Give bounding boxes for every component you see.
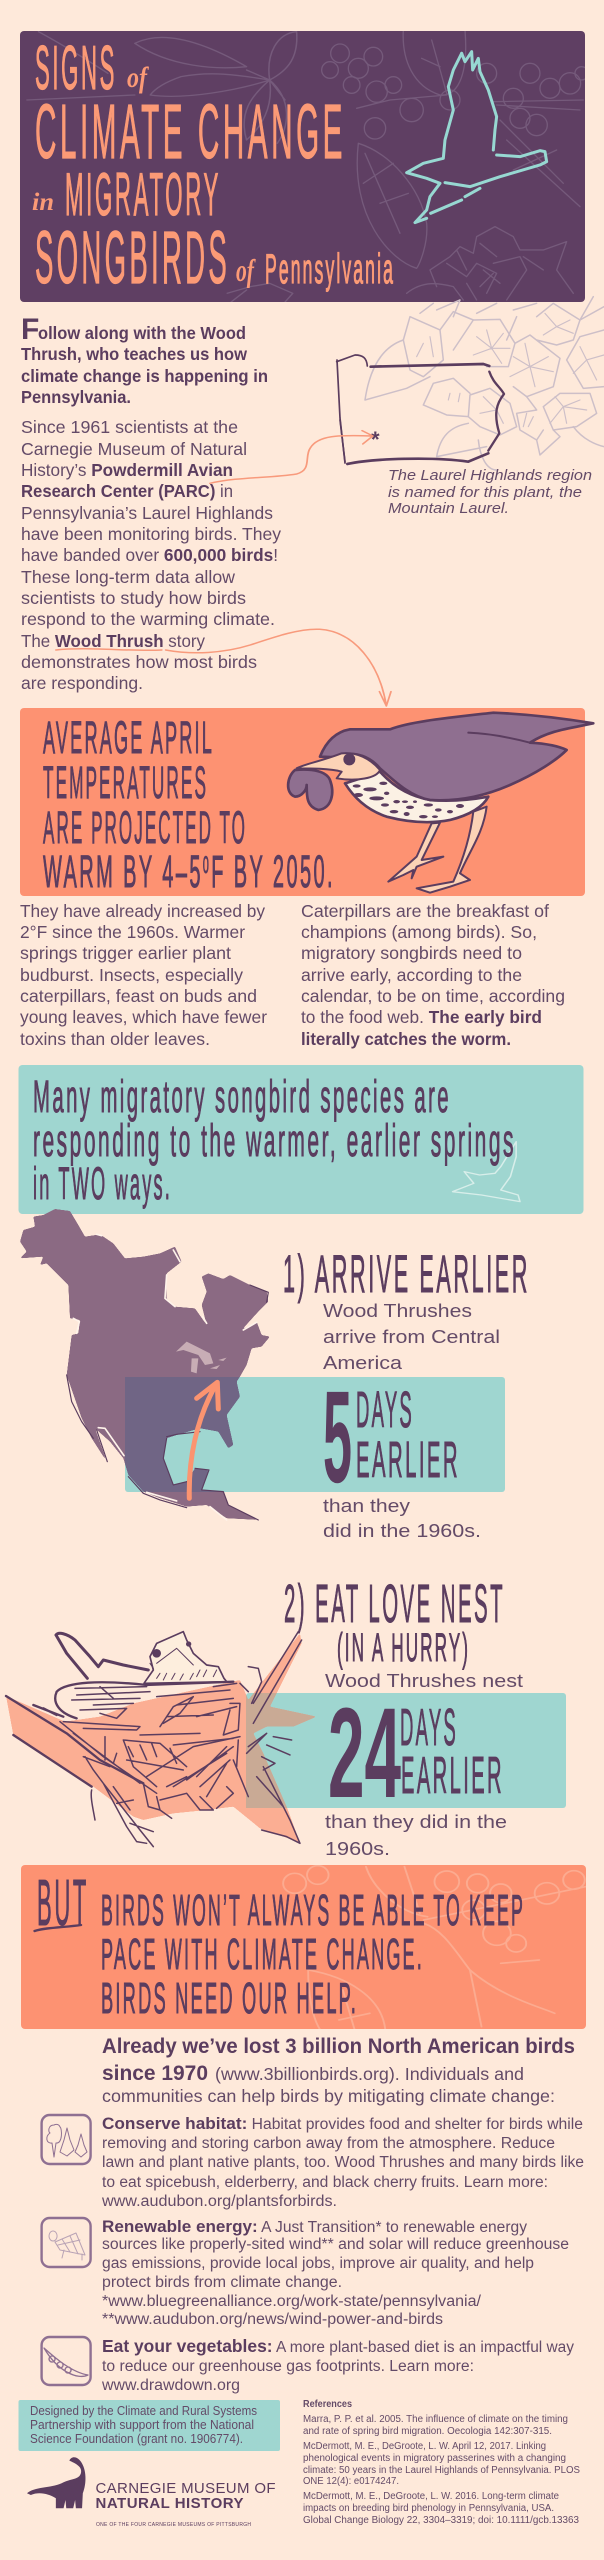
text block: warming right column: arrive early, according to the bbox=[301, 965, 522, 985]
text block: warming right column: literally catches the worm. bbox=[301, 1029, 511, 1049]
caption: Laurel Highlands: The Laurel Highlands region bbox=[388, 468, 592, 484]
caption: Laurel Highlands: is named for this plant, the bbox=[388, 485, 582, 501]
text block: references: McDermott, M. E., DeGroote, L. W. 2016. Long-term climate bbox=[303, 2491, 559, 2502]
text: credits: Designed by the Climate and Rural Systems bbox=[30, 2403, 257, 2418]
text block: conserve habitat: removing and storing carbon away from the atmosphere. Reduce bbox=[102, 2135, 555, 2152]
text block: than they did: than they did in the bbox=[325, 1811, 507, 1832]
text block: warming left column bbox=[20, 901, 267, 1049]
text block: introduction: F bbox=[21, 313, 39, 346]
text block: introduction: are responding. bbox=[21, 673, 143, 693]
icon: mountain laurel outline bbox=[365, 297, 604, 470]
text block: introduction: ollow along with the Wood bbox=[38, 323, 246, 343]
text block: arrive from Central America: arrive from Central bbox=[323, 1326, 500, 1347]
map details: Great Lakes and coast highlights bbox=[67, 1234, 268, 1520]
text block: introduction: History’s Powdermill Avian bbox=[21, 460, 233, 480]
icon: pea pod bbox=[42, 2337, 91, 2385]
text block: introduction: Research Center (PARC) in bbox=[21, 481, 233, 501]
text block: warming left column: young leaves, which have fewer bbox=[20, 1007, 267, 1027]
arrow: PARC to map bbox=[210, 431, 373, 483]
text block: warming right column: calendar, to be on time, according bbox=[301, 986, 565, 1006]
panel: birds need our help bbox=[21, 1865, 586, 2029]
text block: than they did: 1960s. bbox=[325, 1838, 390, 1859]
text block: conserve habitat: www.audubon.org/plantsforbirds. bbox=[101, 2193, 337, 2210]
text block: warming left column: budburst. Insects, especially bbox=[20, 965, 243, 985]
icon: solar panel bbox=[42, 2218, 91, 2267]
text block: than they did bbox=[325, 1811, 507, 1859]
logo: Carnegie Museum of Natural History: NATURAL HISTORY bbox=[96, 2495, 244, 2512]
text block: references: climate: 50 years in the Laurel Highlands of Pennsylvania. PLOS bbox=[303, 2465, 580, 2476]
text block: 3 billion birds lost: since 1970 bbox=[102, 2062, 208, 2085]
icon: dinosaur bbox=[27, 2457, 86, 2508]
text: credits: Partnership with support from the National bbox=[30, 2417, 254, 2432]
caption: Laurel Highlands: Mountain Laurel. bbox=[388, 501, 509, 517]
panel: title header bbox=[20, 30, 588, 302]
map: North America base bbox=[20, 1209, 270, 1520]
text block: introduction bbox=[21, 313, 281, 693]
text block: than in the 1960s: did in the 1960s. bbox=[323, 1520, 481, 1541]
panel: two ways bbox=[18, 1065, 584, 1214]
caption: Laurel Highlands bbox=[388, 468, 592, 517]
heading: But bbox=[35, 1866, 89, 1939]
icon: bird on nest bbox=[6, 1632, 302, 1847]
text block: introduction: Carnegie Museum of Natural bbox=[21, 439, 247, 459]
heading: projected warming: TEMPERATURES bbox=[43, 757, 208, 808]
map: North America overlap with box bbox=[125, 1377, 240, 1492]
panel: April temperatures: F BY 2050. bbox=[211, 846, 335, 897]
text block: introduction: scientists to study how birds bbox=[21, 588, 246, 608]
panel: credits bbox=[18, 2400, 280, 2451]
text block: 3 billion birds lost bbox=[102, 2035, 575, 2106]
text block: eat your vegetables: www.drawdown.org bbox=[101, 2377, 240, 2394]
text block: 3 billion birds lost: Already we’ve lost 3 billion North American birds bbox=[102, 2035, 575, 2058]
panel: five days earlier box bbox=[125, 1377, 505, 1492]
text block: references: ONE 12(4): e0174247. bbox=[303, 2476, 399, 2487]
statistic: 24 days earlier: 24 bbox=[328, 1682, 401, 1825]
statistic: 5 days earlier bbox=[323, 1363, 460, 1510]
text block: warming right column: to the food web. The early bird bbox=[301, 1007, 542, 1027]
heading: projected warming: ARE PROJECTED TO bbox=[43, 802, 247, 853]
text block: warming right column: migratory songbirds need to bbox=[301, 943, 522, 963]
title: Signs of Climate Change in Migratory Songbirds of Pennsylvania bbox=[32, 34, 395, 299]
text block: introduction: Thrush, who teaches us how bbox=[21, 344, 247, 364]
title: Signs of Climate Change in Migratory Songbirds of Pennsylvania: of bbox=[127, 61, 149, 94]
map: star and left border bbox=[337, 360, 345, 463]
arrow: northward migration bbox=[189, 1382, 218, 1498]
text block: introduction: have banded over 600,000 birds! bbox=[21, 545, 278, 565]
text block: eat your vegetables bbox=[101, 2336, 574, 2394]
text block: introduction: Since 1961 scientists at the bbox=[21, 417, 238, 437]
icon: nest peach base bbox=[6, 1633, 317, 1843]
logo: Carnegie Museum of Natural History bbox=[27, 2457, 275, 2528]
title: Signs of Climate Change in Migratory Songbirds of Pennsylvania: SONGBIRDS bbox=[35, 216, 230, 299]
text block: introduction: demonstrates how most birds bbox=[21, 652, 257, 672]
decorative plant outlines in header bbox=[27, 30, 588, 302]
statistic: 24 days earlier: DAYS bbox=[400, 1699, 458, 1757]
text block: references: phenological events in migratory passerines with a changing bbox=[303, 2453, 566, 2464]
text block: conserve habitat: lawn and plant native plants, too. Wood Thrushes and many birds like bbox=[102, 2154, 584, 2171]
heading: two ways bbox=[33, 1071, 516, 1209]
text block: arrive from Central America bbox=[323, 1300, 500, 1373]
text block: conserve habitat: to eat spicebush, elderberry, and black cherry fruits. Learn more: bbox=[102, 2174, 548, 2191]
title: Signs of Climate Change in Migratory Songbirds of Pennsylvania: SIGNS bbox=[35, 34, 117, 103]
text block: renewable energy: protect birds from climate change. bbox=[102, 2274, 342, 2291]
panel: twenty-four days box bbox=[246, 1693, 566, 1808]
heading: eat love nest bbox=[284, 1574, 505, 1670]
title: Signs of Climate Change in Migratory Songbirds of Pennsylvania: in bbox=[32, 189, 54, 216]
statistic: 5 days earlier: 5 bbox=[323, 1363, 352, 1510]
heading: birds can't keep pace bbox=[101, 1886, 525, 2023]
text block: introduction: Pennsylvania’s Laurel Highlands bbox=[21, 503, 273, 523]
heading: projected warming: 0 bbox=[203, 852, 211, 879]
icon: map star: * bbox=[371, 427, 380, 452]
text: credits: Science Foundation (grant no. 1906774). bbox=[30, 2431, 243, 2446]
text block: eat your vegetables: Eat your vegetables: A more plant-based diet is an impactful way bbox=[102, 2336, 574, 2356]
text block: references: and rate of spring bird migration. Oecologia 142:307-315. bbox=[303, 2426, 552, 2437]
text block: conserve habitat bbox=[101, 2114, 584, 2210]
panel: title header: Pennsylvania bbox=[265, 245, 395, 292]
map: Pennsylvania outline with Laurel Highlands star bbox=[337, 355, 504, 464]
text block: than in the 1960s bbox=[323, 1495, 481, 1541]
heading: projected warming: AVERAGE APRIL bbox=[43, 712, 214, 763]
logo: Carnegie Museum of Natural History: ONE OF THE FOUR CARNEGIE MUSEUMS OF PITTSBURGH bbox=[96, 2522, 251, 2528]
heading: projected warming: WARM BY 4–5 bbox=[43, 846, 403, 897]
text block: warming right column: Caterpillars are the breakfast of bbox=[301, 901, 549, 921]
text block: warming right column bbox=[301, 901, 565, 1049]
text block: references: Marra, P. P. et al. 2005. The influence of climate on the timing bbox=[303, 2414, 568, 2425]
text block: introduction: have been monitoring birds. They bbox=[21, 524, 281, 544]
text block: references bbox=[303, 2399, 580, 2526]
heading: projected warming bbox=[43, 712, 335, 897]
icon: flying bird outline bbox=[407, 52, 547, 223]
text block: warming left column: caterpillars, feast on buds and bbox=[20, 986, 257, 1006]
icon: wood thrush eating a caterpillar bbox=[288, 713, 593, 893]
icon: nest overlap with box bbox=[246, 1693, 315, 1808]
text block: renewable energy: gas emissions, provide local jobs, improve air quality, and help bbox=[102, 2255, 534, 2272]
icon: trees bbox=[42, 2115, 91, 2164]
text block: 3 billion birds lost: communities can help birds by mitigating climate change: bbox=[102, 2086, 555, 2106]
panel: birds need our help: BUT bbox=[37, 1866, 89, 1939]
logo: Carnegie Museum of Natural History: CARNEGIE MUSEUM OF bbox=[96, 2480, 276, 2497]
text block: warming left column: toxins than older leaves. bbox=[20, 1029, 210, 1049]
text block: warming left column: 2°F since the 1960s. Warmer bbox=[20, 922, 245, 942]
icon: pale bird outline bbox=[453, 1142, 520, 1202]
panel: April temperatures bbox=[20, 708, 593, 897]
text: credits bbox=[30, 2403, 257, 2446]
text block: introduction: These long-term data allow bbox=[21, 567, 235, 587]
title: Signs of Climate Change in Migratory Songbirds of Pennsylvania: of bbox=[236, 252, 256, 288]
statistic: 5 days earlier: DAYS bbox=[356, 1381, 414, 1438]
text block: references: impacts on breeding bird phenology in Pennsylvania, USA. bbox=[303, 2503, 554, 2514]
text: wood thrushes nest: Wood Thrushes nest bbox=[325, 1670, 523, 1691]
heading: two ways: in TWO ways. bbox=[33, 1158, 172, 1209]
text block: introduction: The Wood Thrush story bbox=[21, 631, 205, 651]
text block: 3 billion birds lost: (www.3billionbirds.org). Individuals and bbox=[215, 2064, 524, 2084]
text block: renewable energy bbox=[102, 2217, 569, 2328]
decorative plant outlines bbox=[283, 1866, 586, 2029]
text block: references: McDermott, M. E., DeGroote, L. W. April 12, 2017. Linking bbox=[303, 2441, 546, 2452]
text block: renewable energy: **www.audubon.org/news/wind-power-and-birds bbox=[102, 2311, 443, 2328]
text block: conserve habitat: Conserve habitat: Habitat provides food and shelter for birds while bbox=[102, 2114, 583, 2133]
title: Signs of Climate Change in Migratory Songbirds of Pennsylvania: MIGRATORY bbox=[65, 161, 221, 228]
text block: renewable energy: *www.bluegreenalliance.org/work-state/pennsylvania/ bbox=[102, 2293, 482, 2310]
text block: arrive from Central America: America bbox=[323, 1352, 403, 1373]
text block: renewable energy: Renewable energy: A Just Transition* to renewable energy bbox=[102, 2217, 527, 2236]
text block: eat your vegetables: to reduce our greenhouse gas footprints. Learn more: bbox=[102, 2358, 474, 2375]
text block: warming right column: champions (among birds). So, bbox=[301, 922, 537, 942]
text block: than in the 1960s: than they bbox=[323, 1495, 411, 1516]
text block: references: References bbox=[303, 2399, 352, 2410]
text block: renewable energy: sources like properly-sited wind** and solar will reduce greenhouse bbox=[102, 2236, 569, 2253]
text block: introduction: climate change is happening in bbox=[21, 366, 268, 386]
text block: introduction: Pennsylvania. bbox=[21, 387, 131, 407]
text block: references: Global Change Biology 22, 3304–3319; doi: 10.1111/gcb.13363 bbox=[303, 2515, 579, 2526]
text block: warming left column: springs trigger earlier plant bbox=[20, 943, 231, 963]
arrow: Wood Thrush to illustration bbox=[56, 629, 391, 706]
text block: warming left column: They have already increased by bbox=[20, 901, 265, 921]
text block: introduction: respond to the warming climate. bbox=[21, 609, 275, 629]
text block: arrive from Central America: Wood Thrushes bbox=[323, 1300, 472, 1321]
